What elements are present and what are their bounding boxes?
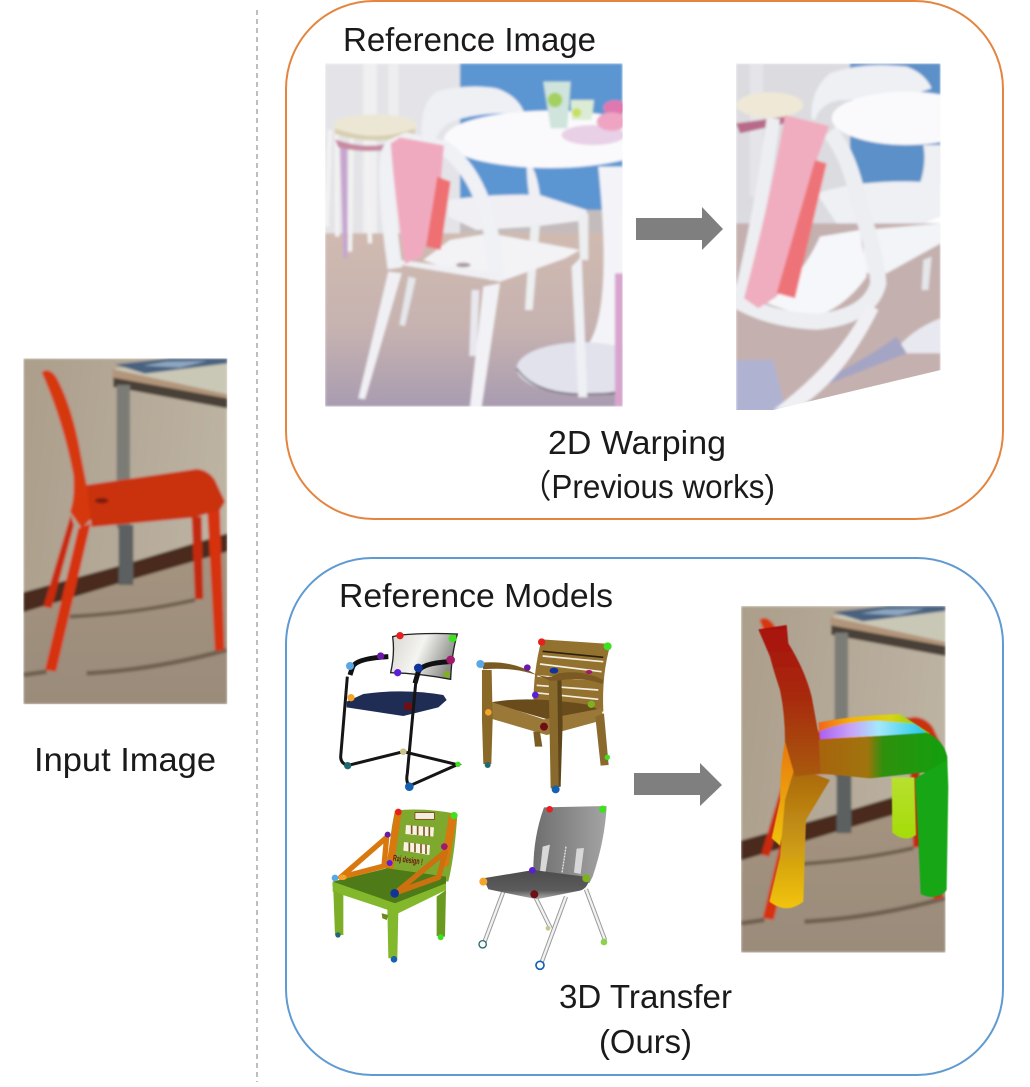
front left leg overlay (769, 767, 830, 908)
caption: ours line: (Ours) (599, 1023, 692, 1060)
right leg overlay (915, 760, 948, 897)
input image: red chair photo (23, 358, 227, 704)
arrow: warp direction (636, 207, 723, 250)
model lettering: Raj design ! (392, 853, 424, 867)
seat front overlay (818, 733, 947, 778)
result image: colored 3D chair overlay on input photo (741, 606, 948, 953)
rear leg overlay (772, 742, 795, 846)
panel: 2D warping (286, 1, 1003, 519)
input image caption: Input Image (34, 741, 216, 778)
middle leg overlay (892, 777, 916, 839)
warped frame (736, 132, 878, 322)
panel: 3D transfer (286, 558, 1003, 1075)
panel border: orange rounded box (286, 1, 1003, 519)
warped seat (767, 230, 867, 318)
warped photo: distorted chair (736, 64, 940, 410)
divider: dashed separator (256, 10, 258, 1082)
chair model: gray school chair (479, 806, 607, 969)
seat top overlay (818, 714, 930, 739)
heading: reference models: Reference Models (339, 577, 613, 614)
caption: 2D warping line: 2D Warping (548, 424, 726, 461)
back overlay (758, 625, 821, 777)
caption: previous works line: （Previous works) (520, 468, 775, 505)
caption: 3D transfer line: 3D Transfer (559, 978, 732, 1015)
chair model: green and orange chair (332, 809, 458, 963)
reference photo: white chairs with towel (325, 63, 656, 407)
arrow: transfer direction (634, 763, 722, 806)
heading: reference image: Reference Image (343, 21, 596, 58)
chair model: wooden armchair (476, 638, 612, 793)
chair model: black cantilever chair (341, 632, 461, 791)
reference models: four 3D chairs (332, 632, 612, 969)
panel border: blue rounded box (286, 558, 1003, 1075)
front chair seat (423, 233, 580, 282)
